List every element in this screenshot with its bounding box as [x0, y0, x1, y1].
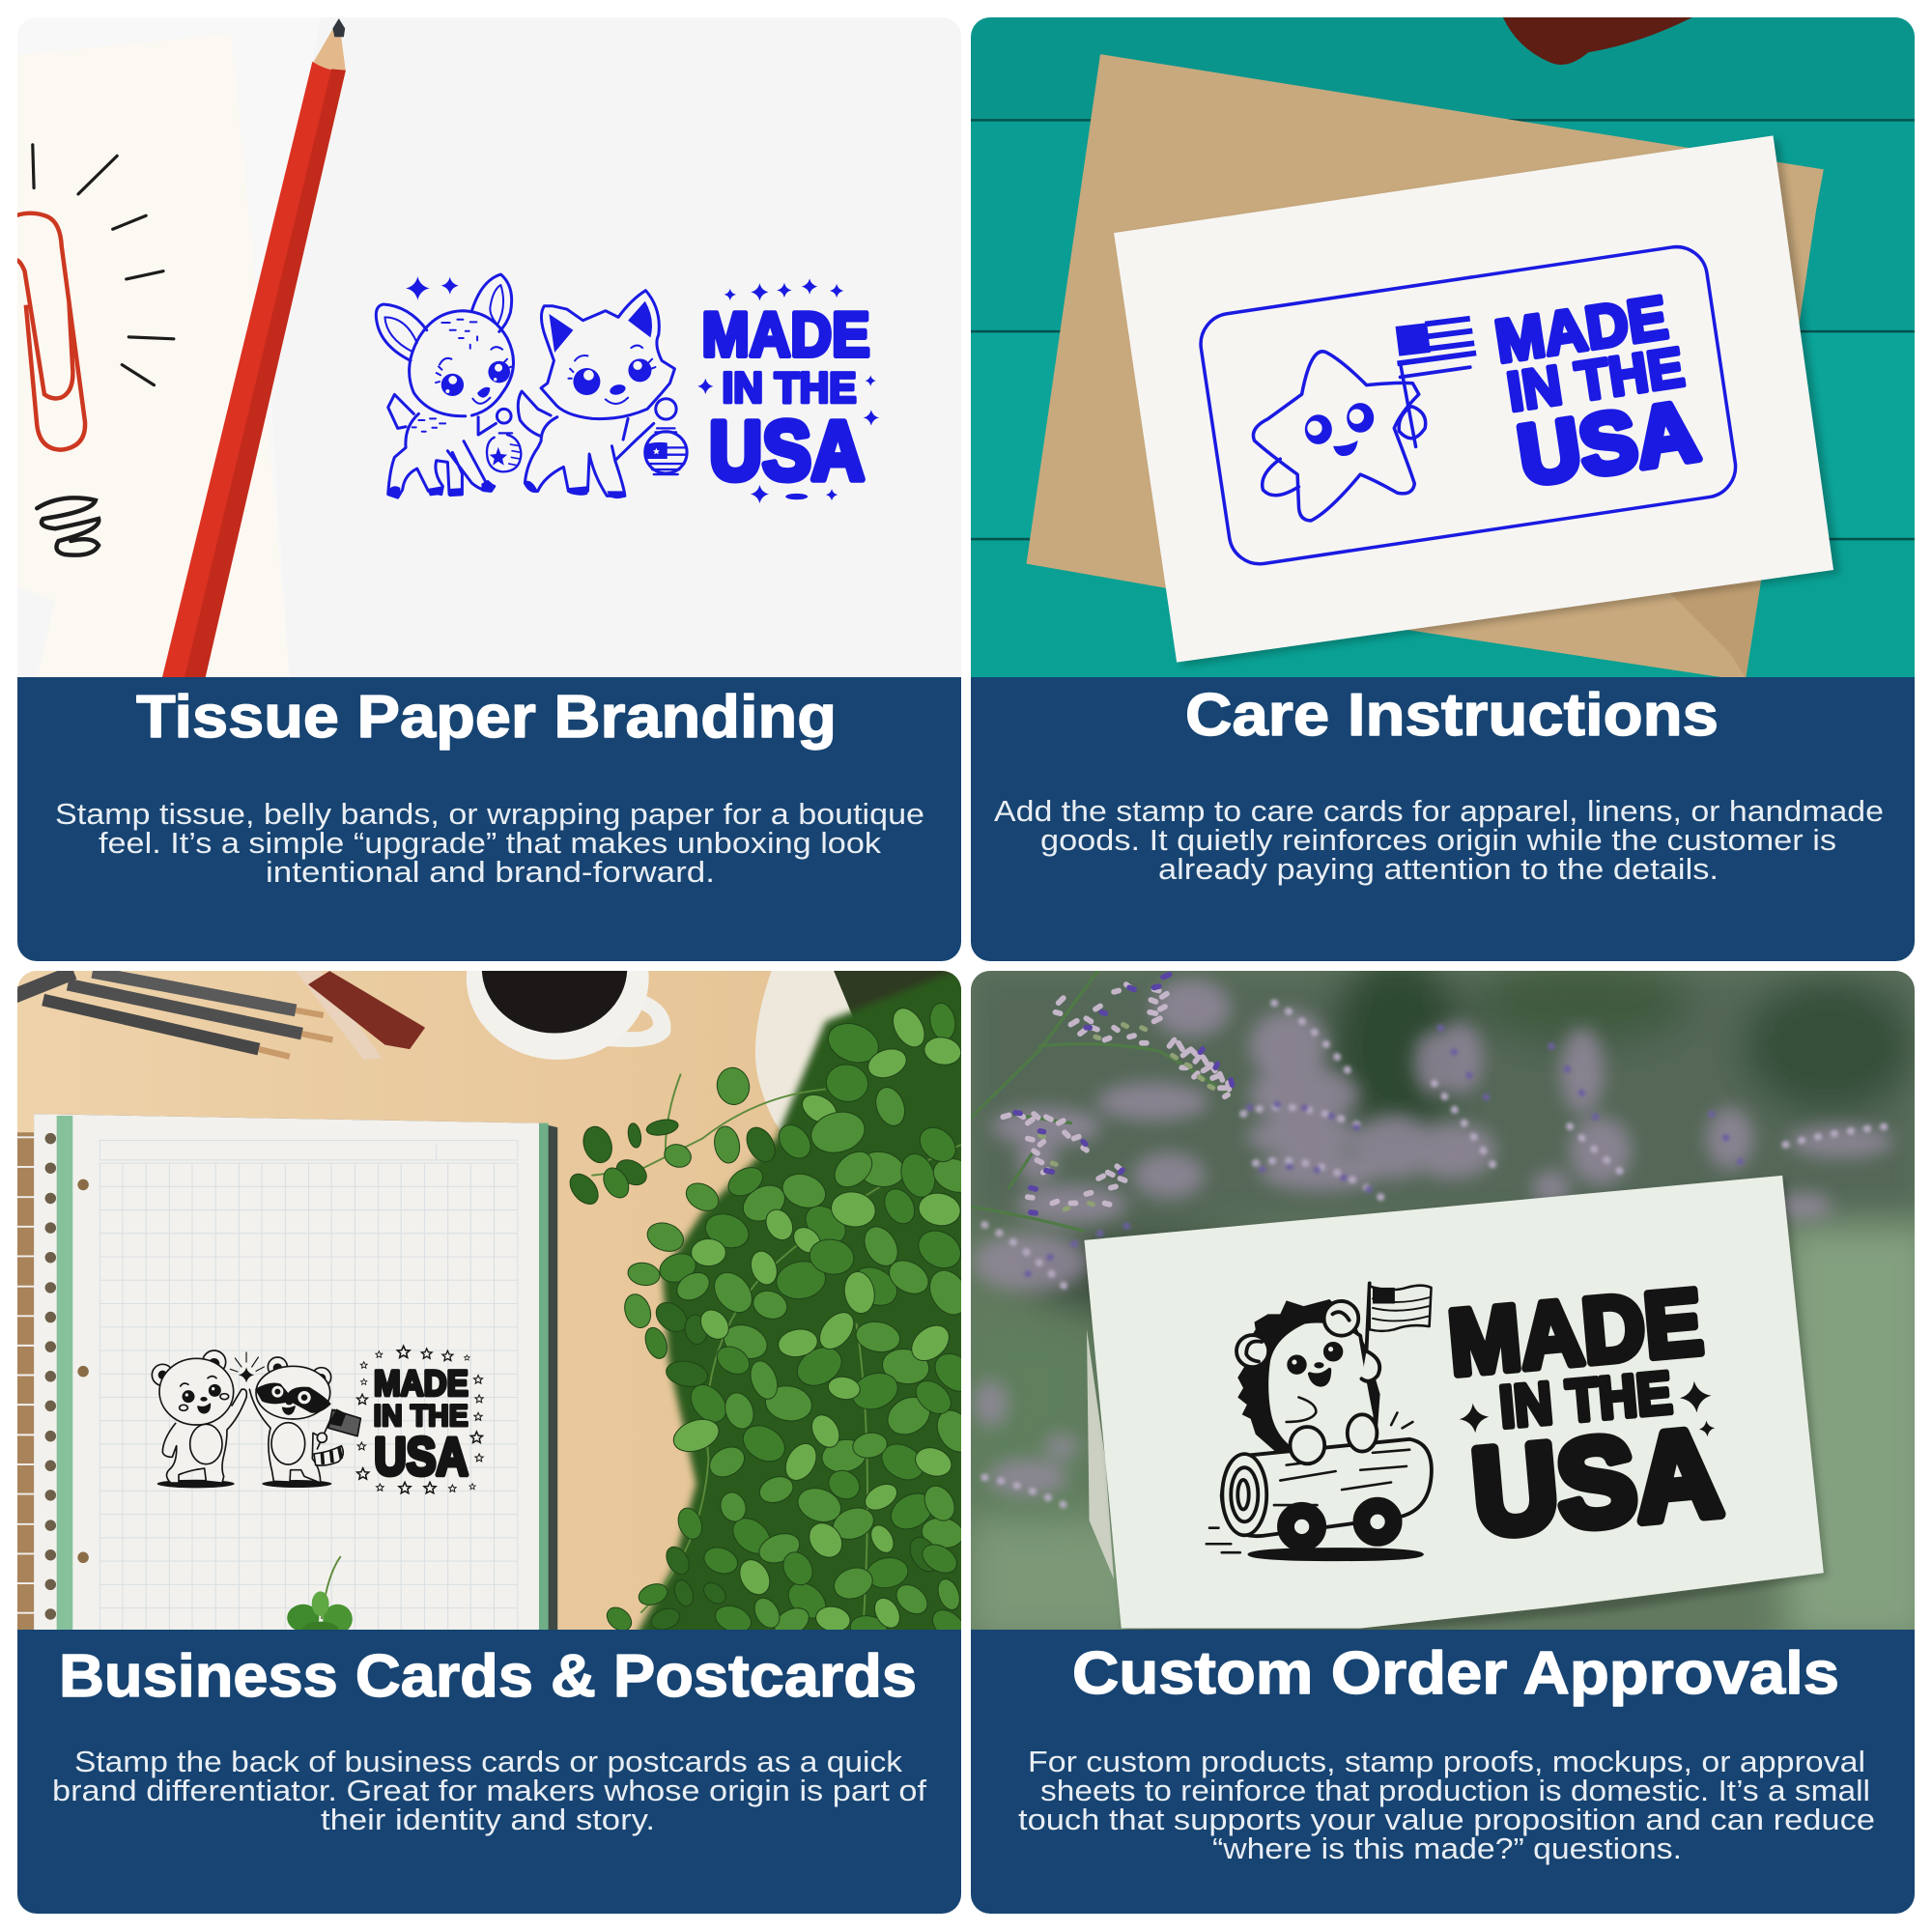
- icon: red pencil: [161, 18, 346, 681]
- stamp text: made in the usa: [357, 1346, 483, 1493]
- stamp text: made in the usa: IN THE: [374, 1399, 469, 1433]
- panel: business cards and postcards: [13, 897, 982, 1914]
- icon: coffee cup: [466, 971, 670, 1060]
- heading: care instructions: Care Instructions: [1185, 682, 1719, 749]
- text block: custom order description: sheets to reinforce that production is domestic. It’s a small: [1040, 1775, 1870, 1807]
- stamp text: made in the usa: IN THE: [1497, 1359, 1674, 1440]
- stamp text: made in the usa: MADE: [1491, 284, 1671, 376]
- stamp text: made in the usa: USA: [1467, 1404, 1726, 1562]
- text block: care instructions description: already paying attention to the details.: [1158, 853, 1719, 886]
- stamp: blue deer and fox with lanterns: [376, 274, 687, 498]
- panel: custom order approvals: [966, 953, 1932, 1914]
- panel: care instructions: [966, 13, 1927, 961]
- heading: tissue paper branding: Tissue Paper Branding: [136, 684, 837, 751]
- text block: custom order description: “where is this made?” questions.: [1212, 1833, 1682, 1865]
- photo: stamped notebook on wood desk with plant: [17, 971, 961, 1630]
- icon: white vase: [755, 971, 852, 1130]
- stamp text: made in the usa: [1493, 294, 1703, 486]
- icon: red clips: [296, 971, 425, 1060]
- text block: business cards description: their identity and story.: [321, 1804, 655, 1836]
- stamp text: made in the usa: IN THE: [723, 364, 857, 412]
- photo: stamped tent card among lilac flowers: [966, 953, 1932, 1644]
- photo: stamped card on kraft envelope on teal boards: [966, 13, 1927, 681]
- text block: business cards description: Stamp the back of business cards or postcards as a quick: [74, 1746, 903, 1778]
- text block: tissue paper description: Stamp tissue, belly bands, or wrapping paper for a boutique: [55, 798, 924, 831]
- stamp text: made in the usa: USA: [1512, 383, 1704, 503]
- caption bar: [17, 1630, 961, 1914]
- notebook: [13, 1114, 557, 1637]
- stamp text: made in the usa: USA: [374, 1428, 469, 1487]
- heading: custom order approvals: Custom Order Approvals: [1072, 1640, 1839, 1707]
- plant: trailing leaves: [564, 966, 982, 1647]
- icon: small clover sprig: [287, 1556, 353, 1638]
- photo: stamped tissue paper with pencil and paperclip: [13, 13, 967, 684]
- text block: tissue paper description: feel. It’s a simple “upgrade” that makes unboxing look: [99, 827, 882, 860]
- text block: business cards description: [52, 1746, 927, 1836]
- card: [1114, 135, 1839, 666]
- icon: red paperclip: [13, 213, 85, 450]
- stamp text: made in the usa: MADE: [701, 299, 870, 370]
- envelope: [1027, 54, 1824, 681]
- text block: care instructions description: [994, 795, 1884, 886]
- text block: custom order description: For custom products, stamp proofs, mockups, or approval: [1028, 1746, 1865, 1778]
- caption bar: [971, 1630, 1915, 1914]
- stamp text: made in the usa: USA: [709, 404, 865, 497]
- text block: care instructions description: Add the stamp to care cards for apparel, linens, or handmade: [994, 795, 1884, 828]
- stamp text: made in the usa: MADE: [374, 1362, 469, 1403]
- icon: pencils: [13, 972, 332, 1057]
- icon: apple at top edge: [1503, 17, 1692, 65]
- flowers: lilac sprigs: [969, 971, 1233, 1231]
- icon: hand-drawn light bulb rays: [33, 145, 174, 555]
- text block: tissue paper description: intentional and brand-forward.: [266, 856, 715, 889]
- caption bar: [17, 677, 961, 961]
- panel: tissue paper branding: [13, 13, 967, 961]
- text block: business cards description: brand differentiator. Great for makers whose origin is part of: [52, 1775, 927, 1807]
- text block: custom order description: touch that supports your value proposition and can reduce: [1018, 1804, 1875, 1836]
- text block: care instructions description: goods. It quietly reinforces origin while the customer is: [1040, 824, 1836, 857]
- text block: tissue paper description: [55, 798, 924, 889]
- stamp text: made in the usa: IN THE: [1503, 336, 1688, 424]
- stamp text: made in the usa: MADE: [1444, 1270, 1706, 1395]
- tent card: [1084, 1176, 1828, 1641]
- stamp text: made in the usa: [1448, 1286, 1726, 1539]
- stamp: hedgehog on wooden log with flag: [1207, 1283, 1432, 1559]
- caption bar: [971, 677, 1915, 961]
- text block: custom order description: [1018, 1746, 1875, 1865]
- stamp: bear and raccoon high five: [152, 1350, 360, 1488]
- stamp: star with flag in rounded frame: [1197, 242, 1740, 568]
- heading: business cards and postcards: Business Cards & Postcards: [59, 1643, 917, 1710]
- stamp text: made in the usa: [697, 278, 879, 503]
